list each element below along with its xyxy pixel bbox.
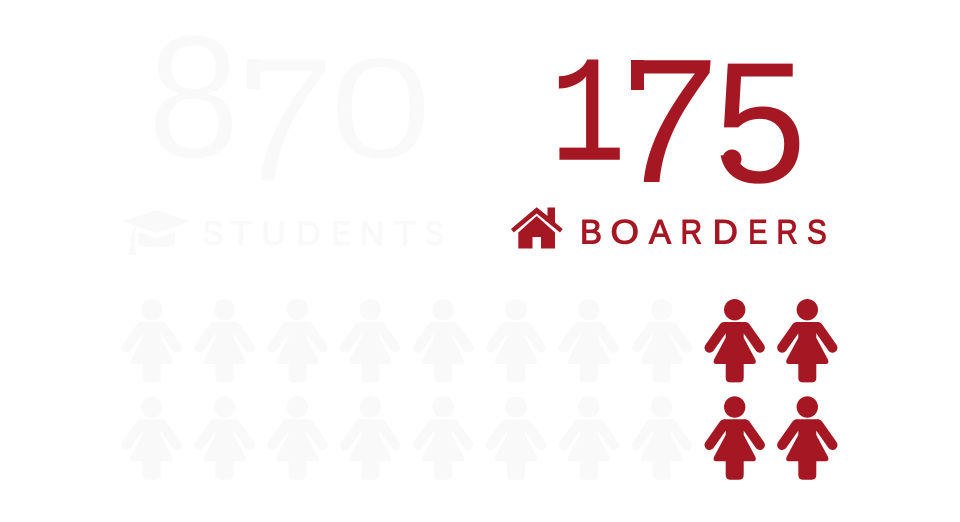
number: 870: 7 [226, 22, 339, 219]
label: boarders: R [776, 213, 798, 251]
label: students: T [394, 215, 416, 253]
label: students: T [230, 215, 252, 253]
label: boarders: S [807, 213, 827, 251]
number: 175: 1 [550, 35, 625, 205]
pictogram: student row 2 [126, 396, 687, 480]
label: students: S [425, 214, 444, 253]
number: 175: 7 [610, 23, 723, 220]
number: 175 [550, 23, 806, 220]
label: boarders: E [748, 212, 768, 251]
label: boarders: O [611, 214, 639, 251]
label: boarders: R [680, 213, 702, 251]
icon: house [511, 207, 563, 248]
label: students: U [261, 215, 286, 253]
number: 870: 8 [147, 0, 240, 195]
label: students [203, 214, 444, 253]
label: boarders: D [713, 214, 738, 251]
pictogram: student row 1 [126, 299, 687, 382]
number: 175: 5 [714, 26, 806, 219]
label: boarders [580, 212, 827, 252]
label: students: N [360, 215, 384, 253]
icon: graduation cap [123, 210, 190, 255]
label: students: E [332, 214, 351, 253]
pictogram: boarders [710, 299, 832, 480]
number: 870: 0 [329, 28, 432, 189]
label: students: S [203, 215, 223, 252]
label: boarders: B [580, 214, 602, 252]
label: students: D [296, 215, 321, 253]
number: 870 [147, 0, 432, 219]
label: boarders: A [649, 214, 672, 252]
